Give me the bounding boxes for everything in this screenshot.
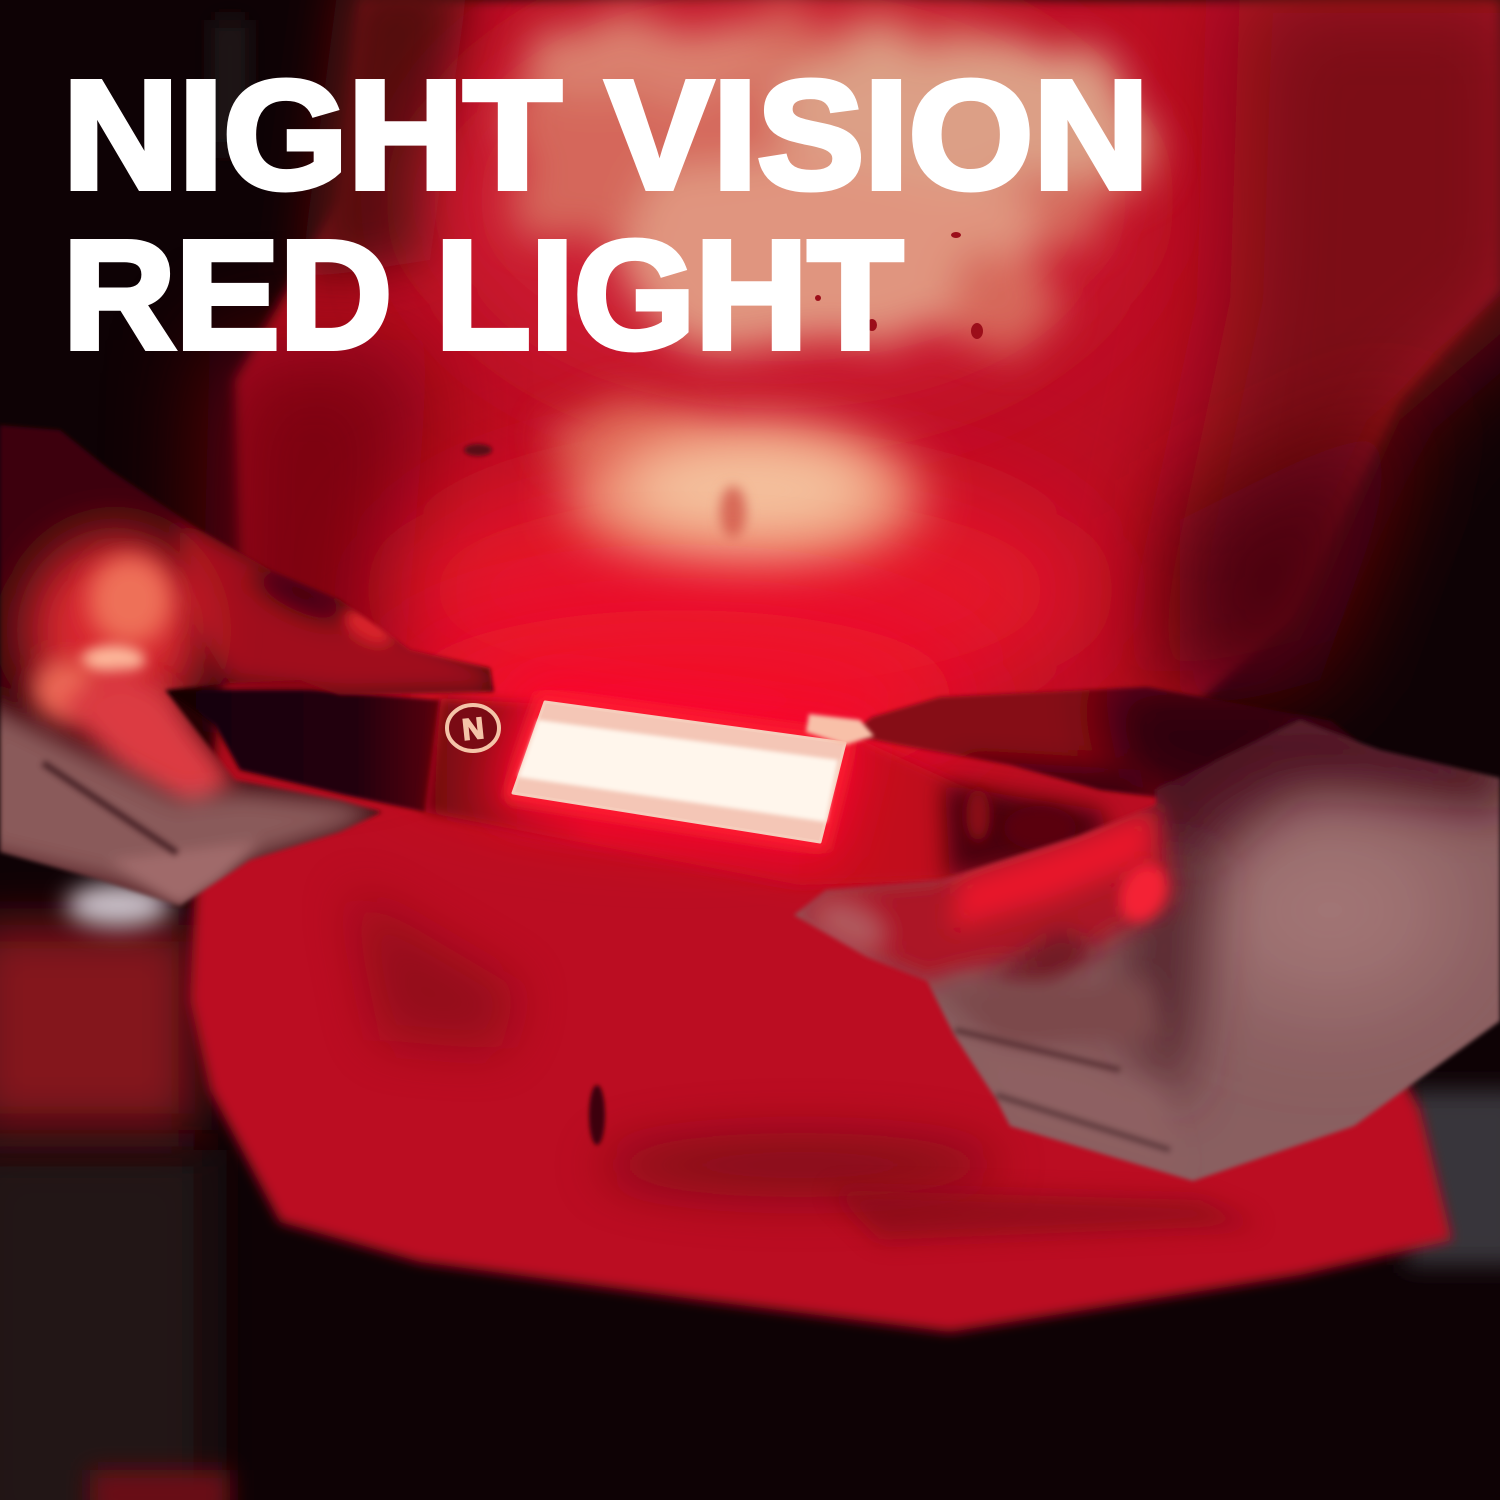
flashlight red glow	[390, 610, 970, 790]
shirt	[190, 0, 1500, 1332]
shirt shading: folds	[350, 890, 520, 1050]
right hand	[780, 680, 1500, 1200]
lit panel centre	[518, 720, 838, 822]
light on the knuckle	[25, 535, 205, 725]
thumb	[862, 684, 1356, 800]
flashlight head	[425, 698, 1090, 885]
lower thumb skin	[0, 700, 382, 906]
title	[63, 49, 1149, 381]
chest stain pattern	[500, 15, 1160, 476]
lower fingers	[930, 980, 1160, 1050]
lit finger	[794, 800, 1175, 985]
finger shadow	[1120, 850, 1210, 1110]
shirt shading: left flank	[200, 340, 430, 740]
shirt stains	[464, 232, 983, 1145]
shirt shading: right shoulder	[1150, 0, 1500, 680]
rear collar	[945, 785, 1110, 878]
lit thumb	[60, 670, 235, 820]
palm and fingers	[780, 700, 1500, 1200]
title line 2: RED LIGHT	[63, 209, 903, 381]
chest light glow	[390, 0, 1160, 720]
lit thumbnail	[806, 714, 874, 745]
title line 1: NIGHT VISION	[63, 49, 1149, 221]
left hand	[0, 420, 500, 910]
logo badge	[447, 705, 499, 751]
flashlight	[165, 690, 1110, 885]
flashlight handle	[165, 690, 440, 812]
panel halo	[513, 702, 845, 842]
upper fingers	[180, 520, 494, 695]
logo badge: N	[461, 712, 486, 747]
grey highlight behind left hand	[66, 883, 170, 927]
lit panel rim	[513, 702, 845, 842]
